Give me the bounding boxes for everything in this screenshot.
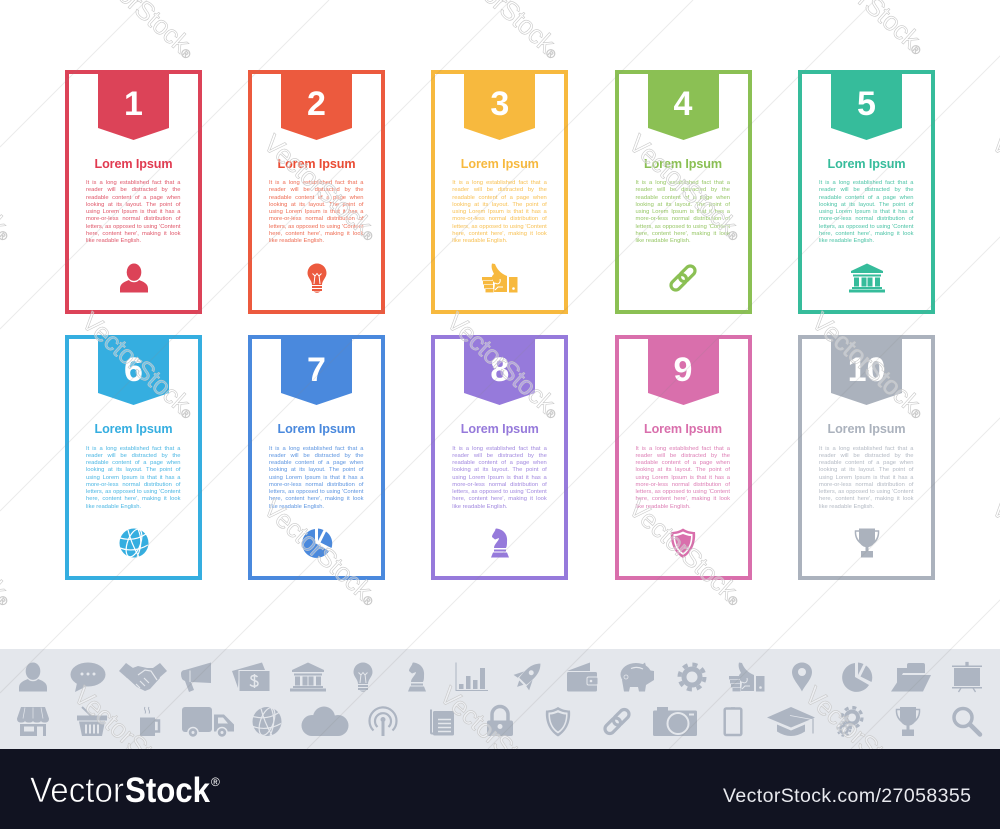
text block: letters, as opposed to using 'Content bbox=[86, 224, 180, 230]
text block: readable content of a page when bbox=[86, 460, 180, 466]
text block: using Lorem Ipsum is that it has a bbox=[452, 475, 547, 481]
text block: more-or-less normal distribution of bbox=[452, 482, 547, 488]
text block bbox=[819, 446, 914, 510]
ribbon: number 10 bbox=[831, 339, 902, 405]
ribbon: number 7: 7 bbox=[307, 350, 326, 388]
text block: letters, as opposed to using 'Content bbox=[86, 489, 180, 495]
text block bbox=[636, 180, 730, 244]
text block: It is a long established fact that a bbox=[636, 180, 730, 186]
text block: It is a long established fact that a bbox=[269, 446, 364, 452]
watermarks: VectorStock® bbox=[799, 680, 925, 798]
icon: light bulb bbox=[308, 264, 326, 293]
text block: more-or-less normal distribution of bbox=[452, 216, 547, 222]
text block: like readable English. bbox=[819, 504, 874, 510]
text block: It is a long established fact that a bbox=[86, 180, 180, 186]
heading: Lorem Ipsum bbox=[644, 156, 722, 170]
text block: looking at its layout. The point of bbox=[86, 467, 180, 473]
text block: reader will be distracted by the bbox=[819, 453, 914, 459]
watermarks: VectorStock® bbox=[623, 128, 749, 246]
text block: using Lorem Ipsum is that it has a bbox=[86, 475, 180, 481]
text block: looking at its layout. The point of bbox=[819, 467, 914, 473]
text block: reader will be distracted by the bbox=[636, 187, 730, 193]
watermarks: VectorStock® bbox=[806, 306, 932, 424]
text block: more-or-less normal distribution of bbox=[269, 482, 364, 488]
text block bbox=[452, 180, 547, 244]
text block: readable content of a page when bbox=[269, 460, 364, 466]
panel: card 9 bbox=[614, 335, 752, 580]
text block: here, content here', making it look bbox=[819, 496, 914, 502]
text block: like readable English. bbox=[819, 238, 874, 244]
icon strip background bbox=[0, 649, 1000, 749]
ribbon: number 1 bbox=[98, 74, 169, 140]
text block: reader will be distracted by the bbox=[269, 187, 364, 193]
text block: reader will be distracted by the bbox=[452, 187, 547, 193]
footer bar bbox=[0, 749, 1000, 829]
ribbon: number 4 bbox=[648, 74, 719, 140]
text block bbox=[86, 446, 180, 510]
text block: like readable English. bbox=[269, 504, 324, 510]
ribbon: number 3: 3 bbox=[490, 85, 509, 123]
panel: card 2 bbox=[248, 70, 385, 314]
text block: here, content here', making it look bbox=[86, 496, 180, 502]
heading: Lorem Ipsum bbox=[461, 156, 539, 170]
text block: It is a long established fact that a bbox=[86, 446, 180, 452]
text block: like readable English. bbox=[636, 504, 691, 510]
text block: using Lorem Ipsum is that it has a bbox=[269, 475, 364, 481]
text block: more-or-less normal distribution of bbox=[636, 482, 730, 488]
icon: globe bbox=[120, 528, 148, 558]
text block: looking at its layout. The point of bbox=[636, 202, 730, 208]
text block: readable content of a page when bbox=[819, 460, 914, 466]
text block: It is a long established fact that a bbox=[819, 446, 914, 452]
text block: reader will be distracted by the bbox=[636, 453, 730, 459]
ribbon: number 2 bbox=[281, 74, 352, 140]
text block: like readable English. bbox=[636, 238, 691, 244]
heading: Lorem Ipsum bbox=[461, 422, 539, 436]
text block: readable content of a page when bbox=[452, 195, 547, 201]
panel: card 3 bbox=[431, 70, 568, 314]
footer logo and id: Stock bbox=[125, 771, 210, 810]
text block: using Lorem Ipsum is that it has a bbox=[819, 475, 914, 481]
text block: looking at its layout. The point of bbox=[819, 202, 914, 208]
text block: here, content here', making it look bbox=[819, 231, 914, 237]
text block: readable content of a page when bbox=[86, 195, 180, 201]
ribbon: number 5: 5 bbox=[857, 85, 876, 123]
text block: like readable English. bbox=[86, 238, 141, 244]
text block: using Lorem Ipsum is that it has a bbox=[636, 475, 730, 481]
panel: card 1 bbox=[65, 70, 202, 314]
text block: like readable English. bbox=[452, 504, 507, 510]
footer logo and id: VectorStock.com/27058355 bbox=[723, 785, 971, 807]
watermarks: VectorStock® bbox=[258, 493, 384, 611]
panel: card 5 bbox=[798, 70, 935, 314]
text block: more-or-less normal distribution of bbox=[636, 216, 730, 222]
heading: Lorem Ipsum bbox=[644, 422, 722, 436]
heading: Lorem Ipsum bbox=[278, 156, 355, 170]
text block: readable content of a page when bbox=[452, 460, 547, 466]
ribbon: number 5 bbox=[831, 74, 902, 140]
ribbon: number 9: 9 bbox=[674, 350, 692, 388]
text block: letters, as opposed to using 'Content bbox=[269, 224, 364, 230]
text block: letters, as opposed to using 'Content bbox=[819, 489, 914, 495]
footer logo and id: ® bbox=[211, 775, 220, 789]
text block: more-or-less normal distribution of bbox=[86, 216, 180, 222]
watermarks: VectorStock® bbox=[76, 306, 202, 424]
text block: letters, as opposed to using 'Content bbox=[269, 489, 364, 495]
text block: here, content here', making it look bbox=[269, 231, 364, 237]
text block: reader will be distracted by the bbox=[86, 187, 180, 193]
text block: here, content here', making it look bbox=[452, 231, 547, 237]
text block bbox=[452, 446, 547, 510]
text block: looking at its layout. The point of bbox=[86, 202, 180, 208]
watermarks: VectorStock® bbox=[258, 128, 384, 246]
watermarks: VectorStock® bbox=[623, 493, 749, 611]
text block: looking at its layout. The point of bbox=[636, 467, 730, 473]
text block: more-or-less normal distribution of bbox=[819, 482, 914, 488]
text block: using Lorem Ipsum is that it has a bbox=[819, 209, 914, 215]
text block: letters, as opposed to using 'Content bbox=[452, 489, 547, 495]
ribbon: number 7 bbox=[281, 339, 352, 405]
icon: person bbox=[120, 264, 148, 292]
ribbon: number 4: 4 bbox=[674, 85, 692, 123]
heading: Lorem Ipsum bbox=[828, 422, 905, 436]
heading: Lorem Ipsum bbox=[94, 156, 172, 170]
text block: reader will be distracted by the bbox=[452, 453, 547, 459]
text block: using Lorem Ipsum is that it has a bbox=[452, 209, 547, 215]
footer logo and id: Vector bbox=[30, 771, 124, 810]
panel: card 8 bbox=[431, 335, 568, 580]
icon: bank bbox=[849, 264, 885, 292]
icon: trophy bbox=[854, 528, 880, 558]
text block: looking at its layout. The point of bbox=[452, 467, 547, 473]
icon: shield bbox=[670, 528, 696, 558]
ribbon: number 3 bbox=[464, 74, 535, 140]
ribbon: number 8 bbox=[464, 339, 535, 405]
text block: reader will be distracted by the bbox=[819, 187, 914, 193]
text block: looking at its layout. The point of bbox=[452, 202, 547, 208]
text block: here, content here', making it look bbox=[86, 231, 180, 237]
text block: readable content of a page when bbox=[269, 195, 364, 201]
watermarks: VectorStock® bbox=[434, 680, 560, 798]
text block: letters, as opposed to using 'Content bbox=[636, 224, 730, 230]
text block bbox=[819, 180, 914, 244]
text block: It is a long established fact that a bbox=[452, 446, 547, 452]
panel: card 6 bbox=[65, 335, 202, 580]
text block: like readable English. bbox=[452, 238, 507, 244]
text block: looking at its layout. The point of bbox=[269, 202, 364, 208]
text block: letters, as opposed to using 'Content bbox=[636, 489, 730, 495]
text block: using Lorem Ipsum is that it has a bbox=[86, 209, 180, 215]
ribbon: number 10: 10 bbox=[848, 350, 885, 388]
text block bbox=[86, 180, 180, 244]
watermarks: VectorStock® bbox=[68, 680, 194, 798]
text block: It is a long established fact that a bbox=[452, 180, 547, 186]
text block: here, content here', making it look bbox=[269, 496, 364, 502]
ribbon: number 2: 2 bbox=[307, 85, 326, 123]
ribbon: number 8: 8 bbox=[490, 350, 509, 388]
text block: here, content here', making it look bbox=[452, 496, 547, 502]
text block: readable content of a page when bbox=[636, 460, 730, 466]
text block: more-or-less normal distribution of bbox=[269, 216, 364, 222]
text block bbox=[269, 446, 364, 510]
ribbon: number 9 bbox=[648, 339, 719, 405]
ribbon: number 1: 1 bbox=[124, 85, 143, 123]
heading: Lorem Ipsum bbox=[278, 422, 355, 436]
icon: thumbs up bbox=[482, 264, 518, 292]
text block: more-or-less normal distribution of bbox=[86, 482, 180, 488]
text block: here, content here', making it look bbox=[636, 231, 730, 237]
text block: It is a long established fact that a bbox=[269, 180, 364, 186]
text block: more-or-less normal distribution of bbox=[819, 216, 914, 222]
panel: card 7 bbox=[248, 335, 385, 580]
text block: here, content here', making it look bbox=[636, 496, 730, 502]
ribbon: number 6: 6 bbox=[124, 350, 143, 388]
text block: letters, as opposed to using 'Content bbox=[819, 224, 914, 230]
watermarks: VectorStock® bbox=[441, 306, 567, 424]
text block bbox=[636, 446, 730, 510]
text block: reader will be distracted by the bbox=[86, 453, 180, 459]
icon: pie chart bbox=[302, 528, 332, 558]
icon: chess knight bbox=[491, 528, 509, 558]
text block: using Lorem Ipsum is that it has a bbox=[636, 209, 730, 215]
panel: card 10 bbox=[798, 335, 935, 580]
icon: chain link bbox=[669, 264, 697, 292]
heading: Lorem Ipsum bbox=[94, 422, 172, 436]
ribbon: number 6 bbox=[98, 339, 169, 405]
text block: like readable English. bbox=[269, 238, 324, 244]
text block bbox=[269, 180, 364, 244]
text block: It is a long established fact that a bbox=[636, 446, 730, 452]
text block: like readable English. bbox=[86, 504, 141, 510]
text block: using Lorem Ipsum is that it has a bbox=[269, 209, 364, 215]
text block: letters, as opposed to using 'Content bbox=[452, 224, 547, 230]
text block: readable content of a page when bbox=[819, 195, 914, 201]
text block: reader will be distracted by the bbox=[269, 453, 364, 459]
panel: card 4 bbox=[614, 70, 752, 314]
footer logo and id bbox=[30, 771, 971, 810]
text block: readable content of a page when bbox=[636, 195, 730, 201]
text block: looking at its layout. The point of bbox=[269, 467, 364, 473]
heading: Lorem Ipsum bbox=[828, 156, 905, 170]
text block: It is a long established fact that a bbox=[819, 180, 914, 186]
